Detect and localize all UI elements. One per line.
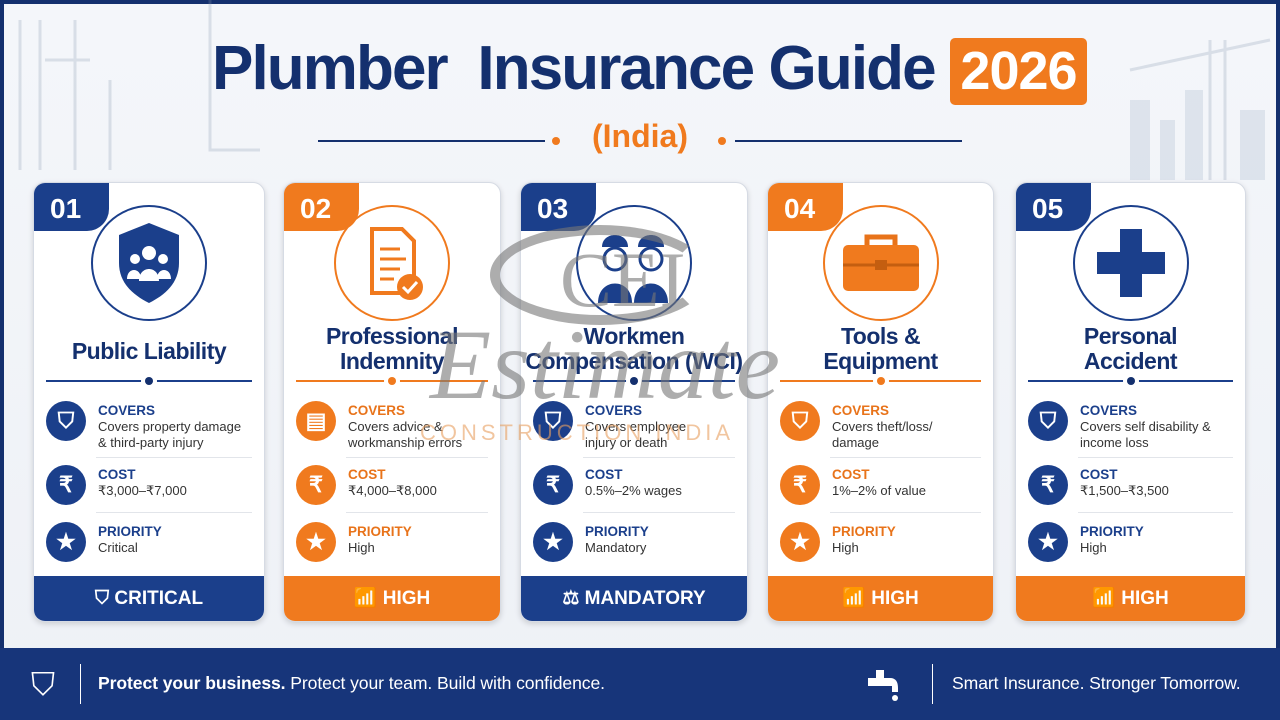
row: priority	[296, 522, 412, 562]
watermark	[420, 225, 780, 445]
icon: faucet	[868, 670, 898, 701]
card 3: Workmen Compensation: COST	[585, 467, 623, 482]
card 4: Tools & Equipment: ₹	[793, 472, 807, 497]
card 5: Personal Accident	[1015, 182, 1246, 622]
card 1: Public Liability: Covers property damage	[98, 419, 241, 434]
card 4: Tools & Equipment: ⛉	[792, 408, 808, 433]
title badge: 2026: 2026	[960, 41, 1077, 101]
card 4: Tools & Equipment: ★	[790, 529, 810, 554]
card 2: Professional Indemnity: ₹	[309, 472, 323, 497]
row: cost	[780, 465, 926, 505]
card 4: Tools & Equipment: damage	[832, 435, 879, 450]
card 5: Personal Accident: Covers self disability &	[1080, 419, 1211, 434]
badge: critical: ⛉ CRITICAL	[95, 588, 203, 609]
card 4: Tools & Equipment	[767, 182, 994, 622]
card 1: Public Liability: COST	[98, 467, 136, 482]
row: covers	[780, 401, 932, 450]
card 4: Tools & Equipment: PRIORITY	[832, 524, 896, 539]
icon: document check	[334, 205, 450, 321]
card 3: Workmen Compensation: Workmen	[584, 323, 684, 349]
card 1: Public Liability: Critical	[98, 540, 138, 555]
icon: workers	[576, 205, 692, 321]
card 4: Tools & Equipment: High	[832, 540, 859, 555]
card 1: Public Liability: ₹3,000–₹7,000	[98, 483, 187, 498]
card 2: Professional Indemnity: workmanship errors	[348, 435, 462, 450]
badge: high	[1016, 576, 1245, 621]
card 2: Professional Indemnity: Indemnity	[340, 348, 444, 374]
row: cost	[533, 465, 682, 505]
card 2: Professional Indemnity: PRIORITY	[348, 524, 412, 539]
card 1: Public Liability: ⛉	[58, 408, 74, 433]
card 5: Personal Accident: ₹1,500–₹3,500	[1080, 483, 1169, 498]
card 3: Workmen Compensation: ★	[543, 529, 563, 554]
footer text right: Smart Insurance. Stronger Tomorrow.	[952, 673, 1241, 693]
row: covers	[46, 401, 241, 450]
background decoration: pipes and city	[18, 0, 1270, 180]
subtitle: (India)	[592, 118, 688, 154]
card 5: Personal Accident: 05	[1032, 193, 1063, 224]
card 2: Professional Indemnity: High	[348, 540, 375, 555]
badge: high	[284, 576, 500, 621]
card 2: Professional Indemnity: Covers advice &	[348, 419, 443, 434]
badge: mandatory	[521, 576, 747, 621]
card 3: Workmen Compensation: PRIORITY	[585, 524, 649, 539]
card 1: Public Liability: COVERS	[98, 403, 155, 418]
card 4: Tools & Equipment: 04	[784, 193, 815, 224]
row: cost	[296, 465, 437, 505]
row: priority	[46, 522, 162, 562]
watermark: CONSTRUCTION INDIA	[420, 420, 734, 445]
footer	[0, 648, 1280, 720]
badge: high	[768, 576, 993, 621]
row: priority	[1028, 522, 1144, 562]
card 4: Tools & Equipment: 1%–2% of value	[832, 483, 926, 498]
card 1: Public Liability: Public Liability	[72, 338, 226, 364]
icon: shield with people	[91, 205, 207, 321]
card 5: Personal Accident: Accident	[1084, 348, 1177, 374]
card 3: Workmen Compensation: Covers employee	[585, 419, 686, 434]
card 1: Public Liability: 01	[50, 193, 81, 224]
card 4: Tools & Equipment: Covers theft/loss/	[832, 419, 932, 434]
card 5: Personal Accident: PRIORITY	[1080, 524, 1144, 539]
title: Plumber Insurance Guide	[212, 34, 935, 103]
card 3: Workmen Compensation: ⛉	[545, 408, 561, 433]
watermark: CEI	[560, 236, 686, 323]
row: cost	[46, 465, 187, 505]
card 5: Personal Accident: ₹	[1041, 472, 1055, 497]
row: priority	[533, 522, 649, 562]
card 5: Personal Accident: Personal	[1084, 323, 1177, 349]
card 5: Personal Accident: ⛉	[1040, 408, 1056, 433]
card 3: Workmen Compensation: 0.5%–2% wages	[585, 483, 682, 498]
card 1: Public Liability: PRIORITY	[98, 524, 162, 539]
row: covers	[296, 401, 462, 450]
badge: mandatory: ⚖ MANDATORY	[562, 588, 706, 609]
card 2: Professional Indemnity: ▤	[306, 408, 326, 433]
card 1: Public Liability	[33, 182, 265, 622]
card 2: Professional Indemnity	[283, 182, 501, 622]
card 4: Tools & Equipment: COST	[832, 467, 870, 482]
card 2: Professional Indemnity: COVERS	[348, 403, 405, 418]
card 5: Personal Accident: COST	[1080, 467, 1118, 482]
card 4: Tools & Equipment: Equipment	[823, 348, 938, 374]
subtitle	[318, 118, 962, 154]
card 2: Professional Indemnity: COST	[348, 467, 386, 482]
footer text left: Protect your business. Protect your team. Build with confidence.	[98, 673, 605, 693]
card 5: Personal Accident: income loss	[1080, 435, 1149, 450]
icon: shield: ⛉	[31, 666, 55, 702]
card 2: Professional Indemnity: 02	[300, 193, 331, 224]
card 3: Workmen Compensation: COVERS	[585, 403, 642, 418]
badge: high: 📶 HIGH	[354, 588, 430, 609]
card 2: Professional Indemnity: Professional	[326, 323, 458, 349]
icon: medical cross	[1072, 205, 1188, 321]
card 5: Personal Accident: High	[1080, 540, 1107, 555]
row: covers	[533, 401, 686, 450]
card 1: Public Liability: & third-party injury	[98, 435, 203, 450]
badge: high: 📶 HIGH	[1092, 588, 1169, 609]
watermark: Estimate	[430, 309, 780, 420]
row: covers	[1028, 401, 1211, 450]
icon: toolbox	[822, 205, 938, 321]
card 3: Workmen Compensation: 03	[537, 193, 568, 224]
card 3: Workmen Compensation: Mandatory	[585, 540, 646, 555]
card 5: Personal Accident: ★	[1038, 529, 1058, 554]
card 3: Workmen Compensation: injury or death	[585, 435, 667, 450]
card 1: Public Liability: ₹	[59, 472, 73, 497]
badge: high: 📶 HIGH	[842, 588, 919, 609]
card 4: Tools & Equipment: COVERS	[832, 403, 889, 418]
card 3: Workmen Compensation: Compensation (WCI)	[525, 348, 743, 374]
card 5: Personal Accident: COVERS	[1080, 403, 1137, 418]
card 2: Professional Indemnity: ★	[306, 529, 326, 554]
badge: critical	[34, 576, 264, 621]
card 4: Tools & Equipment: Tools &	[841, 323, 920, 349]
card 3: Workmen Compensation: ₹	[546, 472, 560, 497]
card 1: Public Liability: ★	[56, 529, 76, 554]
row: cost	[1028, 465, 1169, 505]
card 3: Workmen Compensation	[520, 182, 748, 622]
row: priority	[780, 522, 896, 562]
card 2: Professional Indemnity: ₹4,000–₹8,000	[348, 483, 437, 498]
